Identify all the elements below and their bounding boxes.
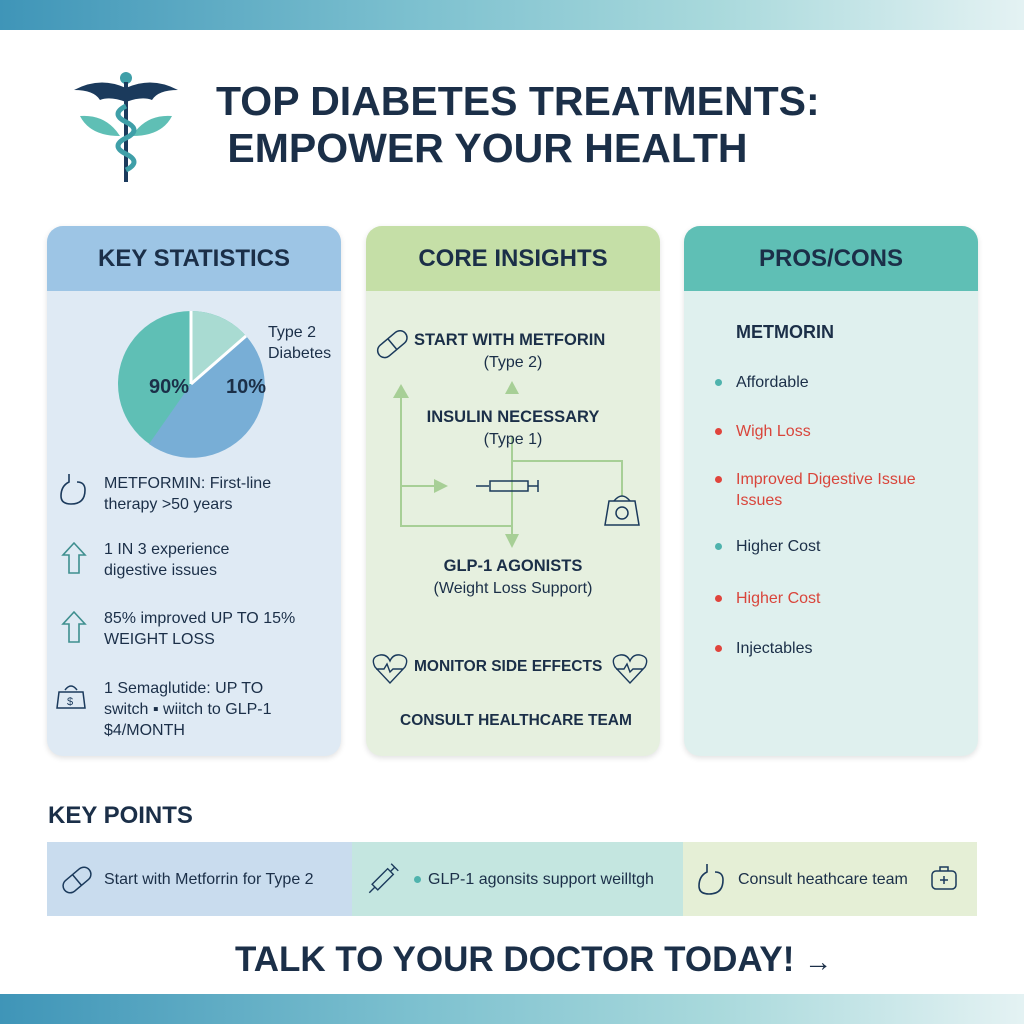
stat: semaglutide: 1 Semaglutide: UP TO xyxy=(104,680,263,697)
icon: syringe xyxy=(476,480,538,492)
logo: caduceus xyxy=(74,72,178,182)
panel: core insights: INSULIN NECESSARY xyxy=(427,408,599,426)
panel: pros/cons: Issues xyxy=(736,492,782,509)
stat: digestive xyxy=(104,541,229,579)
stat: weight loss: WEIGHT LOSS xyxy=(104,631,215,648)
panel: core insights: (Weight Loss Support) xyxy=(434,580,592,597)
flow diagram xyxy=(376,330,640,548)
key points strip: Consult heathcare team xyxy=(738,871,908,888)
monitor side effects: MONITOR SIDE EFFECTS xyxy=(414,658,602,675)
title: EMPOWER YOUR HEALTH xyxy=(227,125,748,171)
stat: semaglutide xyxy=(104,680,272,739)
panel: core insights: GLP-1 AGONISTS xyxy=(444,557,582,575)
panel: key statistics: Diabetes xyxy=(268,345,331,362)
title xyxy=(216,78,820,171)
stat: metformin: therapy >50 years xyxy=(104,496,233,513)
stat: metformin xyxy=(104,475,271,513)
stat: digestive: 1 IN 3 experience xyxy=(104,541,229,558)
stat: metformin: METFORMIN: First-line xyxy=(104,475,271,492)
panel: pros/cons: Wigh Loss xyxy=(736,423,811,440)
stat: weight loss: 85% improved UP TO 15% xyxy=(104,610,295,627)
bottom banner xyxy=(0,994,1024,1024)
stat: semaglutide: switch ▪ wiitch to GLP-1 xyxy=(104,701,272,718)
panel: pros/cons xyxy=(684,226,978,756)
pie chart xyxy=(118,311,266,458)
panel: core insights: (Type 1) xyxy=(484,431,542,448)
icon: pill xyxy=(375,328,410,360)
key points strip: Start with Metforrin for Type 2 xyxy=(104,871,314,888)
key points strip: GLP-1 agonsits support weilltgh xyxy=(428,871,654,888)
panel: core insights: CONSULT HEALTHCARE TEAM xyxy=(400,712,632,729)
panel: core insights xyxy=(366,226,660,756)
call to action: TALK TO YOUR DOCTOR TODAY! → xyxy=(235,940,832,979)
panel: key statistics: KEY STATISTICS xyxy=(98,244,290,272)
icon: scale bag xyxy=(605,496,639,525)
stat: digestive: digestive issues xyxy=(104,562,217,579)
panel: pros/cons: Higher Cost xyxy=(736,538,820,555)
panel: core insights: START WITH METFORIN xyxy=(414,331,605,349)
top banner xyxy=(0,0,1024,30)
panel: key statistics xyxy=(47,226,341,756)
panel: pros/cons: PROS/CONS xyxy=(759,244,903,272)
panel: core insights: CORE INSIGHTS xyxy=(418,244,608,272)
stat: weight loss xyxy=(104,610,295,648)
title: TOP DIABETES TREATMENTS: xyxy=(216,78,820,124)
panel: key statistics: Type 2 xyxy=(268,324,316,341)
key points strip xyxy=(47,842,977,916)
panel: pros/cons: Injectables xyxy=(736,640,812,657)
panel: pros/cons: METMORIN xyxy=(736,322,834,342)
panel: pros/cons: Improved Digestive Issue xyxy=(736,471,916,488)
stat: semaglutide: $4/MONTH xyxy=(104,722,185,739)
pie chart: 90% xyxy=(149,376,189,398)
panel: key statistics: $ xyxy=(67,696,73,708)
panel: pros/cons: Higher Cost xyxy=(736,590,820,607)
panel: pros/cons: Affordable xyxy=(736,374,809,391)
heading: key points: KEY POINTS xyxy=(48,802,193,829)
panel: core insights: (Type 2) xyxy=(484,354,542,371)
pie chart: 10% xyxy=(226,376,266,398)
